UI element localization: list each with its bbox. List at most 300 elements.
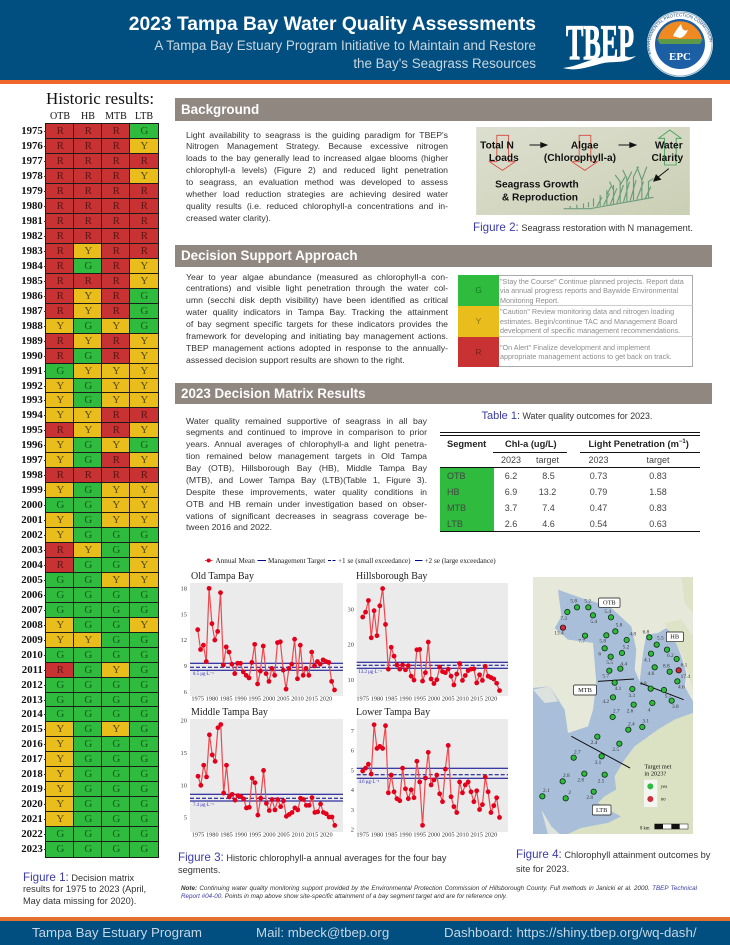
row: yellow: "Caution" Review monitoring data and nitrogen loading [500,307,674,316]
map scale bar: 8 km [640,826,650,831]
decision matrix 1975-2023: G [140,664,148,676]
decision matrix 1975-2023: G [140,798,148,810]
decision matrix 1975-2023: G [112,634,120,646]
decision matrix 1975-2023: R [113,335,120,347]
chart: Middle Tampa Bay: Middle Tampa Bay [191,707,268,718]
chart: Lower Tampa Bay: 1990 [399,832,412,838]
decision matrix 1975-2023: 2017 [21,753,43,765]
decision matrix 1975-2023: Y [140,140,148,152]
decision matrix 1975-2023: R [57,290,64,302]
decision matrix 1975-2023: G [112,828,120,840]
row: yellow [458,306,693,336]
map site values: 5.8 [616,623,623,629]
chart: Lower Tampa Bay: 2 [351,827,354,834]
decision matrix 1975-2023: 2008 [21,619,43,631]
chart: Middle Tampa Bay: 7.4 µg·L⁻¹ [193,802,214,808]
decision matrix 1975-2023: R [113,424,120,436]
decision matrix 1975-2023: 1999 [21,484,43,496]
map site values: 2.7 [613,708,620,714]
decision matrix 1975-2023: 2015 [21,723,43,735]
chart: Middle Tampa Bay: 1975 [192,832,204,838]
decision matrix 1975-2023: 2010 [21,649,43,661]
decision matrix 1975-2023: R [113,469,120,481]
chart: Old Tampa Bay: 15 [180,611,187,618]
decision matrix 1975-2023: 1980 [21,200,43,212]
chart: Old Tampa Bay: 2005 [277,696,289,702]
decision matrix 1975-2023: G [56,604,64,616]
chart: Hillsborough Bay: 1995 [413,696,426,702]
decision matrix 1975-2023: G [84,439,92,451]
text: results: (MTB), and Lower Tampa Bay (LTB)(Table 1, Figure 3). [186,475,427,485]
map site values: 4.1 [615,686,622,692]
chart: Lower Tampa Bay: 2015 [470,832,483,838]
decision matrix 1975-2023: R [57,140,64,152]
decision matrix 1975-2023: Y [112,394,120,406]
decision matrix 1975-2023: R [57,125,64,137]
map site values: 6 [598,651,601,657]
decision matrix 1975-2023: G [84,738,92,750]
chart: Hillsborough Bay: 2000 [428,696,440,702]
table 1 caption: Table 1: Water quality outcomes for 2023. [482,410,652,422]
decision matrix 1975-2023: Y [56,753,64,765]
map site values: 4.6 [678,685,685,691]
figure 1 caption: May data missing for 2020). [23,896,136,906]
decision matrix 1975-2023: R [141,155,148,167]
decision matrix 1975-2023: 2020 [21,798,43,810]
chart: Hillsborough Bay: 2005 [442,696,454,702]
decision matrix 1975-2023: 2007 [21,604,43,616]
map site values: 5.7 [665,693,672,699]
decision matrix 1975-2023: R [113,245,120,257]
decision matrix 1975-2023: Y [56,738,64,750]
decision matrix 1975-2023: Y [56,484,64,496]
heading: 2023 Decision Matrix Results [175,383,712,404]
decision matrix 1975-2023: R [85,275,92,287]
decision matrix 1975-2023: Y [56,723,64,735]
heading: Background [175,98,712,121]
chart: Middle Tampa Bay: 10 [180,782,187,789]
row: green: G [475,285,482,295]
decision matrix 1975-2023: G [140,753,148,765]
decision matrix 1975-2023: G [84,813,92,825]
decision matrix 1975-2023: R [85,215,92,227]
figure 3 caption [178,851,446,875]
matrix column headers: HB [81,110,95,122]
logos [563,11,713,77]
decision matrix 1975-2023: R [113,200,120,212]
decision matrix 1975-2023: Y [140,365,148,377]
decision matrix 1975-2023: G [84,649,92,661]
heading: Decision Support Approach: Decision Support Approach [181,248,358,263]
chart: Lower Tampa Bay: 2020 [485,832,497,838]
table 1: water quality outcomes: 13.2 [539,487,556,497]
decision matrix 1975-2023: R [57,215,64,227]
decision matrix 1975-2023: G [56,499,64,511]
diagram labels: Loads [489,153,519,164]
heading: 2023 Decision Matrix Results: 2023 Decision Matrix Results [181,386,366,401]
chart: Middle Tampa Bay: 2010 [292,832,304,838]
decision matrix 1975-2023: R [113,155,120,167]
footer: mail: Mail: mbeck@tbep.org [256,924,389,940]
decision matrix 1975-2023: G [112,843,120,855]
table 1: water quality outcomes: 2.6 [505,519,517,529]
decision matrix 1975-2023: Y [112,723,120,735]
decision matrix 1975-2023: Y [56,783,64,795]
chart: Old Tampa Bay: Old Tampa Bay [191,571,254,582]
chart: Middle Tampa Bay: 5 [184,814,187,822]
table 1: water quality outcomes: 2023 [588,455,609,465]
decision matrix 1975-2023: Y [84,245,92,257]
text: background: Light availability to seagrass is the guiding paradigm for TBEP's [186,130,448,140]
map site values: 5.4 [590,619,597,625]
chart: Lower Tampa Bay: 3 [351,807,354,814]
decision matrix 1975-2023: R [141,245,148,257]
decision matrix 1975-2023: Y [112,484,120,496]
chart: Old Tampa Bay: 1990 [234,696,247,702]
figure 1 caption: Figure 1: Decision matrix [23,870,134,884]
decision matrix 1975-2023: 2004 [21,559,43,571]
decision matrix 1975-2023: Y [140,619,148,631]
decision matrix 1975-2023: R [57,200,64,212]
chart: Hillsborough Bay: 20 [348,642,354,649]
text: background: whether load reduction strategies are achieving desired water [186,189,448,199]
decision matrix 1975-2023: G [84,574,92,586]
decision matrix 1975-2023: G [84,664,92,676]
text: results: years. Annual averages of chlorophyll-a and light penetra- [186,439,427,449]
decision matrix 1975-2023: G [84,499,92,511]
text: decision support: umn (secchi disk depth visibility) have been identified as critical [186,295,448,305]
decision matrix 1975-2023: R [113,260,120,272]
matrix column headers: MTB [105,110,127,122]
decision matrix 1975-2023: R [57,424,64,436]
map label: LTB: LTB [596,807,607,814]
map site values: 5.2 [584,599,591,605]
decision matrix 1975-2023: G [112,738,120,750]
decision matrix 1975-2023: R [113,140,120,152]
chart: Lower Tampa Bay: Lower Tampa Bay [356,707,430,718]
chart: Hillsborough Bay: 1980 [371,696,383,702]
decision matrix 1975-2023: R [57,469,64,481]
map site values: 2.7 [574,750,581,756]
map site values: 6.1 [681,662,688,668]
figure 4 caption: site for 2023. [516,864,569,874]
heading: Background: Background [181,102,259,117]
decision matrix 1975-2023: 1976 [21,140,43,152]
map site values: 4.6 [648,671,655,677]
text: decision support: centrations) and visible light penetration through the water col- [186,283,448,293]
decision matrix 1975-2023: 1988 [21,320,43,332]
subtitle [154,38,536,71]
decision matrix 1975-2023: 1984 [21,260,43,272]
map sites not met [560,625,681,673]
chart: Hillsborough Bay: 30 [348,606,354,614]
text: results: vations of significant decreases in seagrass coverage be- [186,510,427,520]
decision matrix 1975-2023: G [84,843,92,855]
decision matrix 1975-2023: R [57,260,64,272]
decision matrix 1975-2023: G [140,604,148,616]
decision matrix 1975-2023: 2009 [21,634,43,646]
decision matrix 1975-2023: Y [140,424,148,436]
chart legend [205,557,496,565]
map site values: 4.8 [629,632,636,638]
chart: Hillsborough Bay: 2010 [456,696,469,702]
figure 1 caption [23,870,146,906]
decision matrix 1975-2023: R [113,305,120,317]
decision matrix 1975-2023: Y [84,335,92,347]
figure 3 caption: segments. [178,865,220,875]
diagram labels: Algae [571,140,599,151]
map site values [543,599,690,801]
decision matrix 1975-2023: G [140,708,148,720]
map site values: 5.5 [657,636,664,642]
decision matrix 1975-2023: 1985 [21,275,43,287]
decision matrix 1975-2023: G [84,260,92,272]
decision matrix 1975-2023: G [84,768,92,780]
subtitle: A Tampa Bay Estuary Program Initiative to Maintain and Restore [154,38,536,53]
decision matrix 1975-2023: G [140,783,148,795]
decision matrix 1975-2023: Y [112,499,120,511]
chart: Old Tampa Bay: 2015 [305,696,318,702]
decision matrix 1975-2023: G [84,679,92,691]
text: decision support: TBEP management actions adopted in response to the annually- [186,343,448,353]
figure 4: site map [533,577,693,834]
text: decision support [186,272,448,365]
map site values: 7.3 [560,616,567,622]
decision matrix 1975-2023: R [85,200,92,212]
decision matrix 1975-2023: R [113,185,120,197]
decision matrix 1975-2023: Y [84,634,92,646]
chart: Lower Tampa Bay: 2010 [456,832,469,838]
decision matrix 1975-2023: G [112,649,120,661]
diagram labels: & Reproduction [502,193,578,204]
logo: EPC seal: EPC [669,51,691,63]
decision matrix 1975-2023: G [112,694,120,706]
map legend: yes [661,785,667,790]
decision matrix 1975-2023: G [84,320,92,332]
chart: Lower Tampa Bay: 1975 [356,832,369,838]
chart: Middle Tampa Bay: 2000 [263,832,276,838]
decision matrix 1975-2023: 1990 [21,350,43,362]
decision matrix 1975-2023: G [140,694,148,706]
table 1: water quality outcomes: Chl-a (ug/L) [505,439,557,449]
chart legend: Management Target [268,557,325,565]
map site values: 4.4 [620,661,627,667]
decision matrix 1975-2023: Y [112,664,120,676]
decision matrix 1975-2023: Y [140,394,148,406]
map site values: 17.4 [681,674,690,680]
decision matrix 1975-2023: R [85,170,92,182]
decision matrix 1975-2023: G [140,439,148,451]
chart: Middle Tampa Bay: 20 [180,718,187,724]
decision matrix 1975-2023: 1979 [21,185,43,197]
decision matrix 1975-2023: G [112,679,120,691]
text: background: Nitrogen Management Strategy. Because excessive nitrogen [186,141,448,151]
decision matrix 1975-2023: Y [84,409,92,421]
decision matrix 1975-2023: 2006 [21,589,43,601]
chart: Hillsborough Bay: 1990 [399,696,412,702]
text: results: segments and continued to improve in comparison to prior [186,427,427,437]
row: green [458,275,693,306]
decision matrix 1975-2023: G [140,768,148,780]
map label: HB [666,632,683,642]
decision matrix 1975-2023: G [84,394,92,406]
matrix column headers [50,110,153,122]
footnote: Note: Continuing water quality monitoring support provided by the Environmental Protection Commission of Hillsborough County. Full methods in Janicki et al. 2000. TBEP Technical [181,885,697,892]
decision matrix 1975-2023: Y [56,634,64,646]
decision matrix 1975-2023: 2005 [21,574,43,586]
map sites met [540,605,680,801]
text: decision support: framework for developing and initiating bay management actions. [186,331,448,341]
figure 2 caption: Figure 2: Seagrass restoration with N management. [473,221,693,234]
decision matrix 1975-2023: Y [140,559,148,571]
table 1: water quality outcomes: 0.83 [649,471,667,481]
chart: Middle Tampa Bay: 2020 [320,832,333,838]
decision matrix 1975-2023: R [85,140,92,152]
map legend: Target met [644,764,672,771]
decision matrix 1975-2023: R [57,559,64,571]
chart: Old Tampa Bay: 2000 [263,696,275,702]
decision matrix 1975-2023: G [140,320,148,332]
text: background: loads to the bay generally lead to increased algae blooms (higher [186,153,448,163]
chart: Hillsborough Bay: 10 [348,677,354,684]
decision matrix 1975-2023: Y [112,574,120,586]
table 1: water quality outcomes: 0.63 [649,519,667,529]
decision matrix 1975-2023: 1975 [21,125,43,137]
map legend: in 2023? [644,771,666,778]
table 1: water quality outcomes: 6.9 [505,487,517,497]
logo: TBEP: TBEP [566,14,634,70]
text: results: OTB and HB remain under investigation based on obser- [186,499,427,509]
map site values: 2.8 [586,795,593,801]
decision matrix 1975-2023: 1997 [21,454,43,466]
row: red: "On Alert" Finalize development and implement [500,342,650,352]
map site values: 5.7 [602,674,609,680]
decision matrix 1975-2023: G [84,753,92,765]
map scale bar [640,824,688,831]
decision matrix 1975-2023: 2013 [21,694,43,706]
decision matrix 1975-2023: Y [56,409,64,421]
decision matrix 1975-2023: 1978 [21,170,43,182]
decision matrix 1975-2023: R [85,155,92,167]
logo: EPC seal: ENVIRONMENTAL PROTECTION COMMISSION [647,13,713,54]
decision matrix 1975-2023: G [140,589,148,601]
map segment divider lines [571,679,684,768]
table 1: water quality outcomes: 1.58 [649,487,667,497]
decision matrix 1975-2023: R [57,335,64,347]
decision matrix 1975-2023: G [84,589,92,601]
diagram labels: Seagrass Growth [495,179,579,190]
chart: Middle Tampa Bay: 1990 [235,832,247,838]
decision matrix 1975-2023: 1982 [21,230,43,242]
chart: Lower Tampa Bay [351,707,508,838]
decision matrix 1975-2023: Y [84,424,92,436]
decision matrix 1975-2023: R [57,230,64,242]
map site values: 7.7 [578,639,585,645]
map site values: 2.4 [591,740,598,746]
map site values: 2.8 [577,777,584,783]
decision matrix 1975-2023: Y [112,439,120,451]
decision matrix 1975-2023: R [113,350,120,362]
table 1: water quality outcomes: MTB [447,503,466,513]
header band [0,0,730,84]
table 1: water quality outcomes: 0.73 [590,471,607,481]
decision matrix 1975-2023: Y [84,544,92,556]
decision matrix 1975-2023: R [57,155,64,167]
chart: Lower Tampa Bay: 7 [351,728,355,735]
decision matrix 1975-2023: R [57,245,64,257]
map label: MTB: MTB [578,687,592,694]
table 1: water quality outcomes: 2023 [501,455,521,465]
decision matrix 1975-2023 [21,123,159,858]
decision matrix 1975-2023: G [56,708,64,720]
chart: Old Tampa Bay: 2010 [291,696,304,702]
decision matrix 1975-2023: G [84,529,92,541]
chart: Old Tampa Bay: 9 [184,663,187,670]
table 1: water quality outcomes: 7.4 [542,503,555,513]
text: decision support: assessed decision support results are shown to the right. [186,355,405,365]
map site values: 3.8 [672,704,679,710]
decision matrix 1975-2023: Y [56,320,64,332]
row: green: via annual progress reports and Baywide Environmental [500,286,678,295]
chart: Lower Tampa Bay: 2005 [442,832,454,838]
map site values: 3.1 [595,760,602,766]
decision matrix 1975-2023: Y [56,394,64,406]
decision matrix 1975-2023: R [113,170,120,182]
map legend [644,764,672,807]
row: red: R [475,346,482,356]
decision matrix 1975-2023: G [84,350,92,362]
decision matrix 1975-2023: Y [140,544,148,556]
decision matrix 1975-2023: G [56,365,64,377]
map site values: 4.1 [644,657,651,663]
map label: LTB [592,805,611,815]
chart legend: Annual Mean [216,557,255,565]
map site values: 2.6 [627,708,634,714]
figure 2: seagrass restoration diagram [476,127,690,215]
table 1: water quality outcomes: 6.2 [505,471,517,481]
decision matrix 1975-2023: R [57,350,64,362]
decision matrix 1975-2023: G [84,514,92,526]
decision matrix 1975-2023: R [113,125,120,137]
chart: Hillsborough Bay [348,571,508,702]
decision matrix 1975-2023: 2019 [21,783,43,795]
decision matrix 1975-2023: Y [56,768,64,780]
decision matrix 1975-2023: G [140,529,148,541]
decision matrix 1975-2023: Y [56,813,64,825]
diagram labels: (Chlorophyll-a) [544,153,616,164]
decision matrix 1975-2023: R [85,230,92,242]
decision key table [458,275,693,367]
decision matrix 1975-2023: Y [56,454,64,466]
table 1: water quality outcomes: LTB [447,519,463,529]
table 1: water quality outcomes: target [536,455,559,465]
decision matrix 1975-2023: Y [84,305,92,317]
map site values: 2.4 [628,722,635,728]
decision matrix 1975-2023: G [140,828,148,840]
decision matrix 1975-2023: G [140,843,148,855]
map site values: 4 [648,707,651,713]
decision matrix 1975-2023: G [140,634,148,646]
decision matrix 1975-2023: Y [56,529,64,541]
map site values: 5.2 [623,645,630,651]
decision matrix 1975-2023: R [113,290,120,302]
decision matrix 1975-2023: Y [140,574,148,586]
chart legend: +2 se (large exceedance) [424,557,496,565]
decision matrix 1975-2023: R [141,469,148,481]
chart: Hillsborough Bay: 1975 [356,696,369,702]
decision matrix 1975-2023: R [141,230,148,242]
decision matrix 1975-2023: Y [112,320,120,332]
